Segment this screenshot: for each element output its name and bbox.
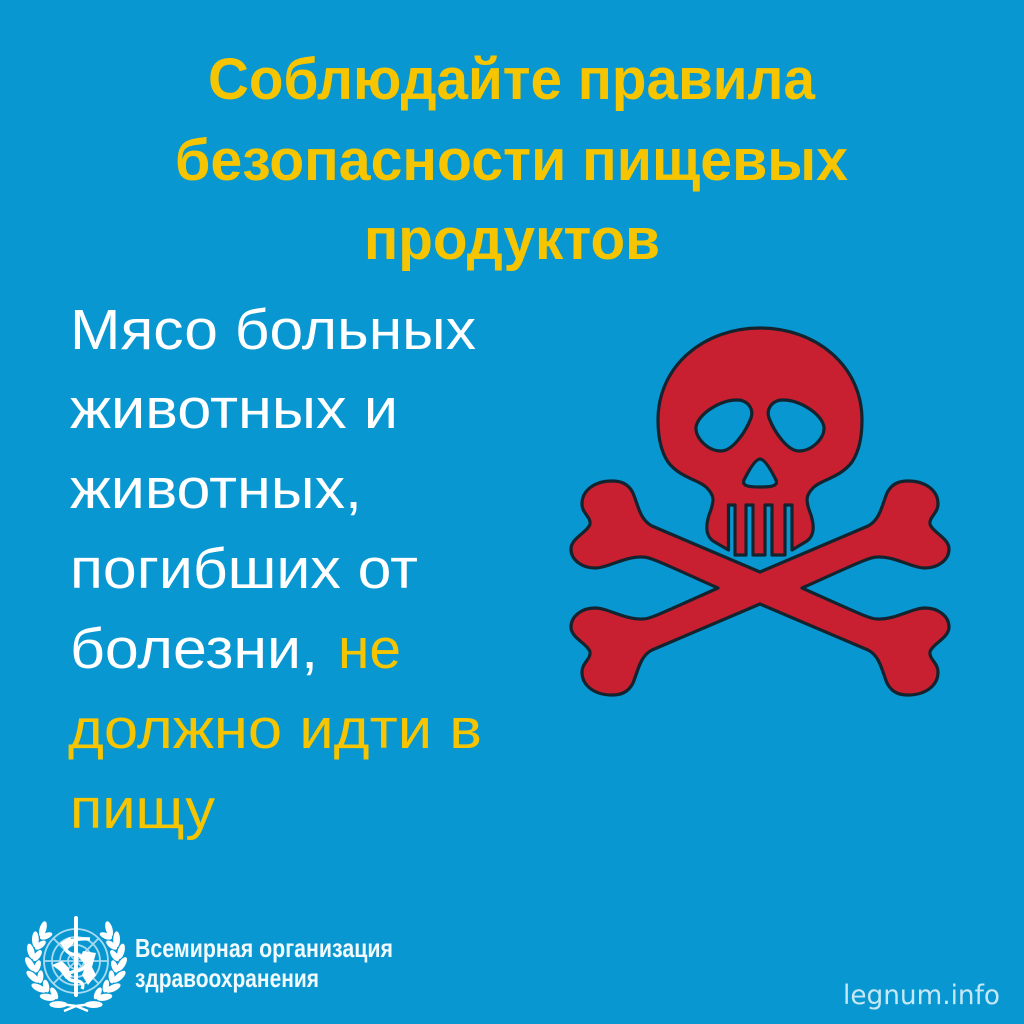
text block: warning message: Мясо больных xyxy=(70,298,476,362)
icon: skull xyxy=(658,328,862,555)
staff and serpent xyxy=(65,918,90,995)
logo text: organisation name: Всемирная организация xyxy=(135,933,393,963)
text block: warning message xyxy=(68,298,482,841)
left laurel wreath xyxy=(23,920,67,1008)
title: продуктов xyxy=(364,207,660,272)
icon: crossbones xyxy=(571,481,949,695)
title: безопасности пищевых xyxy=(175,128,848,193)
text block: warning message: животных, xyxy=(70,457,362,521)
globe xyxy=(44,929,108,993)
text block: warning message: не xyxy=(338,617,401,681)
icon: skull and crossbones xyxy=(571,328,949,695)
text block: warning message: болезни, xyxy=(70,617,318,681)
title: Соблюдайте правила xyxy=(208,47,816,112)
text block: warning message: пищу xyxy=(70,777,216,841)
continents xyxy=(52,937,96,985)
title xyxy=(175,47,848,272)
wreath tie xyxy=(52,1003,100,1011)
logo text: organisation name: здравоохранения xyxy=(135,963,319,993)
logo: WHO emblem xyxy=(23,918,129,1011)
watermark: legnum.info xyxy=(843,980,1000,1011)
text block: warning message: погибших от xyxy=(70,537,418,601)
logo text: organisation name xyxy=(135,933,393,993)
text block: warning message: должно идти в xyxy=(68,697,482,761)
text block: warning message: животных и xyxy=(70,377,398,441)
right laurel wreath xyxy=(85,920,129,1008)
